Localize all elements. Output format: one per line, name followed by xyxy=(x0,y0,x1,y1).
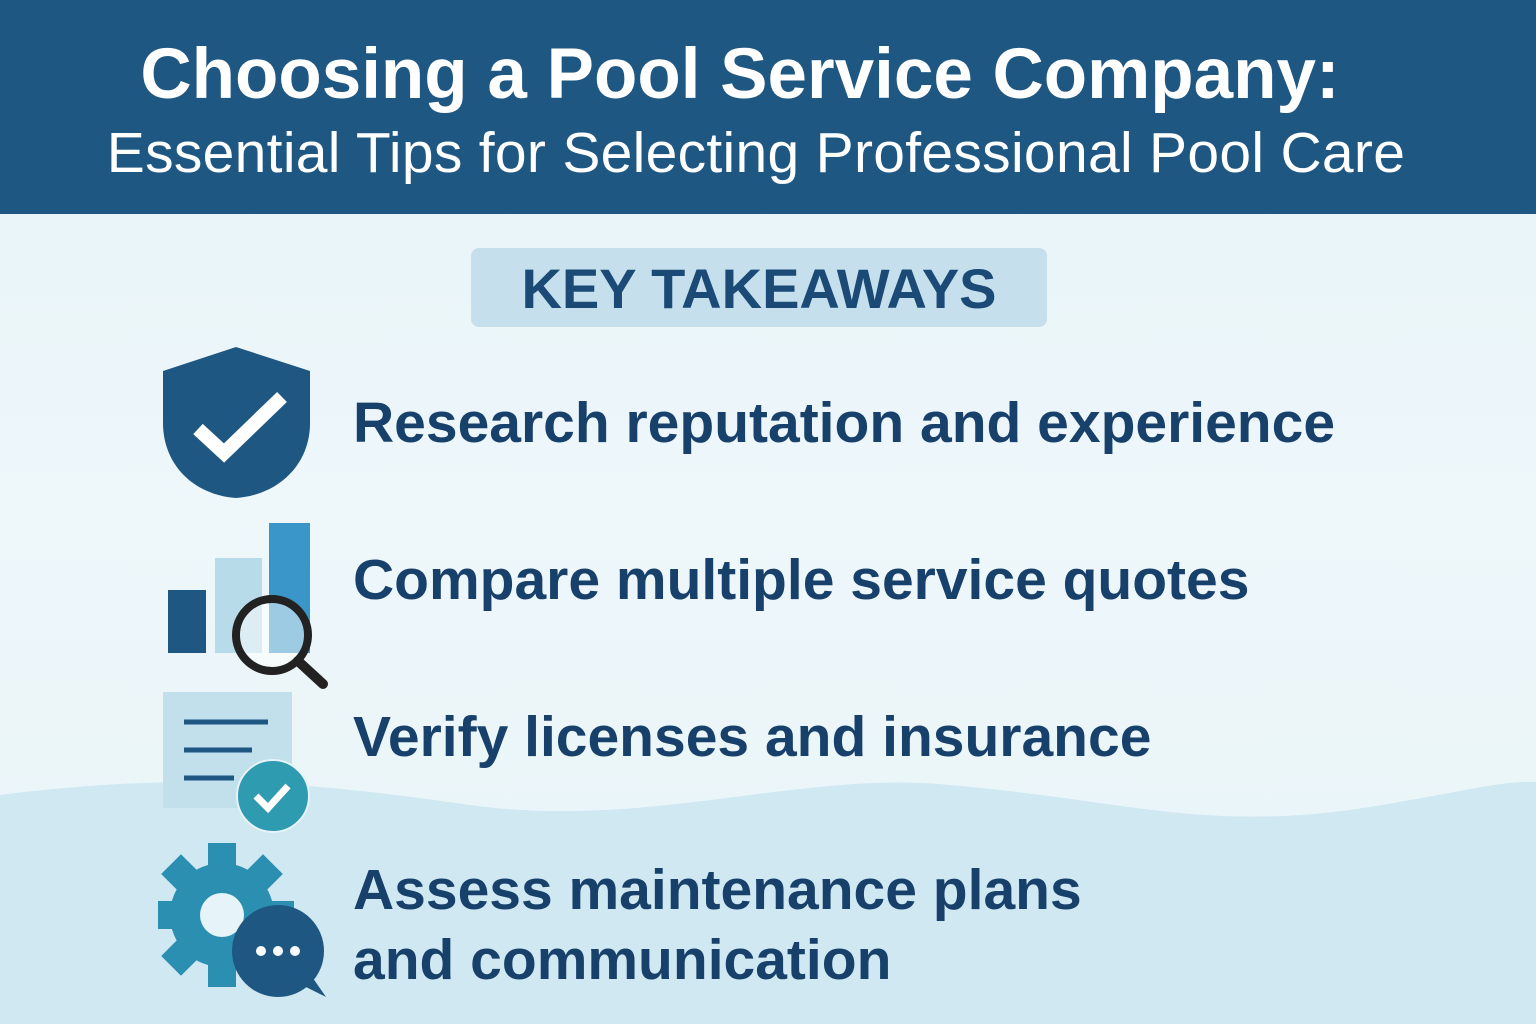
item 4 xyxy=(353,858,1082,992)
icon: bar chart with magnifier xyxy=(168,523,328,689)
item 1: Research reputation and experience xyxy=(353,391,1335,455)
item 2: Compare multiple service quotes xyxy=(353,548,1249,612)
item 4: Assess maintenance plans xyxy=(353,858,1082,922)
key takeaways label: KEY TAKEAWAYS xyxy=(521,257,997,320)
icon: document with check xyxy=(163,692,310,833)
title: Choosing a Pool Service Company: xyxy=(140,35,1340,114)
subtitle: Essential Tips for Selecting Professional Pool Care xyxy=(107,121,1405,185)
icon: gear with chat bubble xyxy=(158,843,326,997)
icon: shield check xyxy=(163,347,310,498)
key takeaways label xyxy=(471,248,1047,327)
item 4: and communication xyxy=(353,928,891,992)
header xyxy=(0,0,1536,214)
item 3: Verify licenses and insurance xyxy=(353,705,1151,769)
